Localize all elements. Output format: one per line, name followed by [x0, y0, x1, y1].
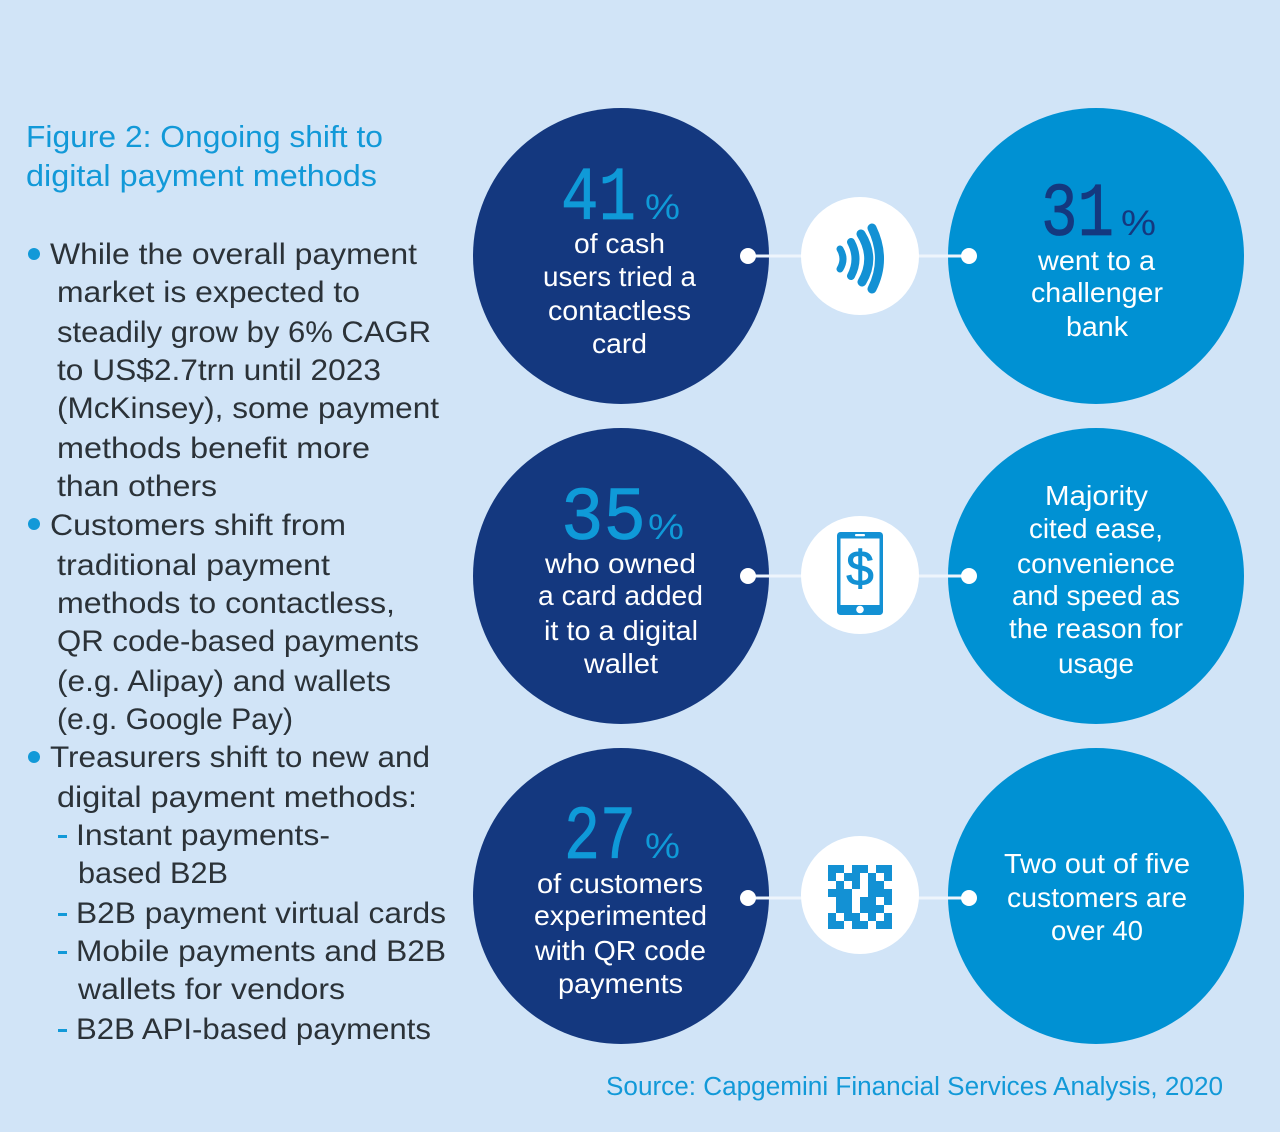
text block: bullet points — [28, 238, 446, 1046]
bullet: customers shift: QR code-based payments — [57, 625, 419, 658]
bullet: treasurers shift: B2B API-based payments — [76, 1013, 431, 1046]
bullet: customers shift: methods to contactless, — [57, 587, 395, 620]
bullet: customers shift: (e.g. Google Pay) — [57, 703, 293, 736]
circle: 41% contactless: 41 — [561, 156, 636, 242]
circle: 41% contactless: card — [592, 328, 647, 359]
circle: two out of five — [948, 748, 1244, 1044]
icon: contactless waves — [801, 197, 919, 315]
circle: 35% digital wallet: it to a digital — [544, 615, 698, 646]
icon: phone with dollar — [801, 516, 919, 634]
connector: right — [918, 890, 977, 906]
connector: right — [918, 248, 977, 264]
circle: 27% QR payments: % — [645, 827, 680, 866]
circle: 31% challenger bank: went to a — [1037, 245, 1156, 276]
circle: majority reason for usage: cited ease, — [1029, 513, 1163, 544]
connector: left — [740, 248, 802, 264]
circle: 41% contactless: users tried a — [543, 261, 697, 292]
title: digital payment methods — [26, 158, 377, 193]
bullet: customers shift: Customers shift from — [50, 509, 346, 542]
bullet: customers shift: traditional payment — [57, 549, 331, 582]
circle: two out of five: customers are — [1007, 882, 1187, 913]
bullet: treasurers shift: Instant payments- — [76, 819, 330, 852]
circle: two out of five: Two out of five — [1004, 848, 1190, 879]
connector: left — [740, 890, 802, 906]
circle: 35% digital wallet — [473, 428, 769, 724]
circle: 27% QR payments: experimented — [534, 900, 707, 931]
title: Figure 2: Ongoing shift to — [26, 119, 383, 154]
bullet: overall payment market: (McKinsey), some payment — [57, 392, 440, 425]
circle: 35% digital wallet: wallet — [583, 648, 658, 679]
circle: 41% contactless — [473, 108, 769, 404]
circle: 35% digital wallet: a card added — [538, 580, 703, 611]
bullet: overall payment market: steadily grow by 6% CAGR — [57, 316, 431, 349]
circle: majority reason for usage — [948, 428, 1244, 724]
bullet: treasurers shift — [28, 741, 446, 1046]
circle: 31% challenger bank: % — [1121, 204, 1156, 243]
icon: phone with dollar: $ — [846, 542, 874, 596]
circle: 35% digital wallet: 35 — [561, 476, 646, 562]
circle: 31% challenger bank — [948, 108, 1244, 404]
bullet: customers shift: (e.g. Alipay) and wallets — [57, 665, 391, 698]
circle: 27% QR payments: payments — [558, 968, 683, 999]
circle: 31% challenger bank: challenger — [1031, 277, 1163, 308]
circle: 41% contactless: % — [645, 188, 680, 227]
panel: contactless card row — [473, 108, 1244, 404]
bullet: overall payment market: market is expected to — [57, 276, 360, 309]
circle: 27% QR payments — [473, 748, 769, 1044]
connector: right — [918, 568, 977, 584]
circle: two out of five: over 40 — [1051, 915, 1143, 946]
circle: majority reason for usage: the reason for — [1009, 613, 1183, 644]
bullet: treasurers shift: digital payment methods: — [57, 781, 417, 814]
source note: Source: Capgemini Financial Services Analysis, 2020 — [606, 1073, 1223, 1101]
title — [26, 119, 383, 193]
bullet: customers shift — [28, 509, 419, 736]
circle: 27% QR payments: 27 — [564, 795, 636, 881]
circle: 31% challenger bank: bank — [1066, 311, 1128, 342]
bullet: overall payment market: While the overall payment — [50, 238, 418, 271]
bullet: treasurers shift: Mobile payments and B2B — [76, 935, 446, 968]
bullet: treasurers shift: wallets for vendors — [77, 973, 345, 1006]
circle: 41% contactless: contactless — [548, 295, 691, 326]
bullet: overall payment market: to US$2.7trn until 2023 — [57, 354, 381, 387]
bullet: overall payment market: than others — [57, 470, 217, 503]
bullet: overall payment market — [28, 238, 440, 503]
circle: 31% challenger bank: 31 — [1041, 172, 1114, 258]
panel: digital wallet row — [473, 428, 1244, 724]
panel: QR code row — [473, 748, 1244, 1044]
circle: majority reason for usage: Majority — [1045, 480, 1148, 511]
circle: 27% QR payments: of customers — [537, 868, 703, 899]
bullet: overall payment market: methods benefit more — [57, 432, 370, 465]
circle: 41% contactless: of cash — [574, 228, 665, 259]
bullet: treasurers shift: Treasurers shift to new and — [50, 741, 430, 774]
bullet: treasurers shift: based B2B — [78, 857, 228, 890]
circle: majority reason for usage: usage — [1058, 648, 1134, 679]
circle: majority reason for usage: convenience — [1017, 548, 1175, 579]
circle: 27% QR payments: with QR code — [534, 935, 706, 966]
connector: left — [740, 568, 802, 584]
bullet: treasurers shift: B2B payment virtual cards — [76, 897, 446, 930]
circle: 35% digital wallet: % — [648, 508, 684, 547]
circle: majority reason for usage: and speed as — [1012, 580, 1180, 611]
icon: QR code — [801, 836, 919, 954]
circle: 35% digital wallet: who owned — [544, 548, 696, 579]
